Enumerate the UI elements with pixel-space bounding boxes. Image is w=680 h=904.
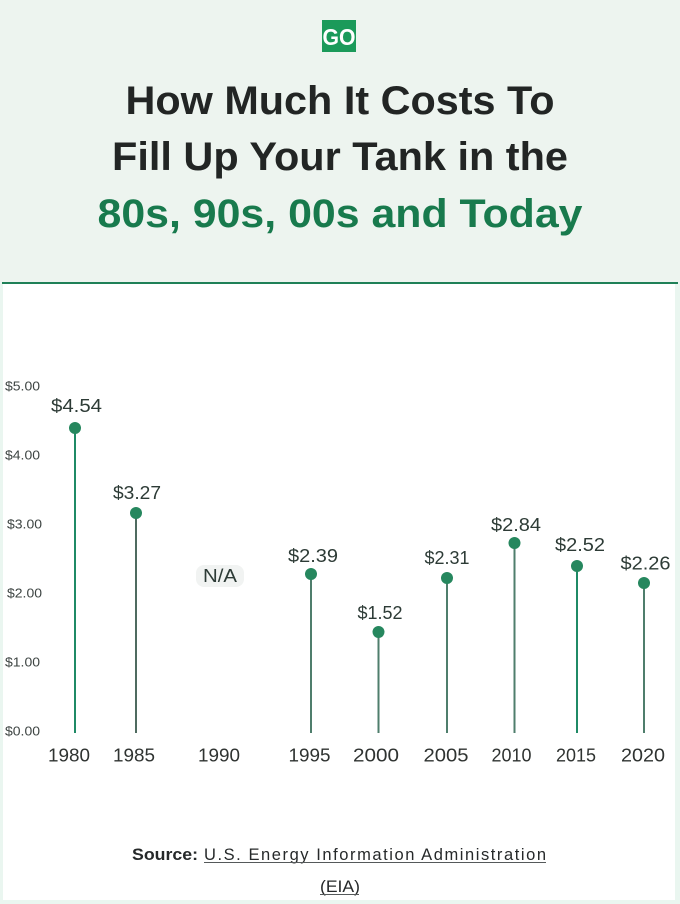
y-axis labels: $5.00 <box>5 380 40 394</box>
x-axis labels: 2010 <box>492 744 532 766</box>
label: 1990 N/A: N/A <box>203 566 237 586</box>
x-axis labels: 2015 <box>556 744 596 766</box>
source note <box>132 846 546 896</box>
label: 1990 N/A <box>196 565 244 587</box>
y-axis labels: $2.00 <box>7 586 42 600</box>
x-axis labels: 2000 <box>353 744 399 766</box>
x-axis labels: 2005 <box>424 744 468 766</box>
x-axis labels: 1980 <box>48 744 90 766</box>
bar: 1995: $2.39 <box>288 545 338 566</box>
title: Fill Up Your Tank in the <box>112 135 568 179</box>
x-axis labels: 1985 <box>113 744 155 766</box>
x-axis labels <box>48 744 665 766</box>
source note: U.S. Energy Information Administration <box>204 846 546 864</box>
bar: 1985: $3.27 <box>113 482 161 503</box>
panel: chart area <box>3 284 675 900</box>
title: How Much It Costs To <box>126 79 554 123</box>
y-axis labels <box>5 380 42 738</box>
y-axis labels: $3.00 <box>7 518 42 532</box>
bar: 1980 <box>51 395 102 733</box>
source note: Source: <box>132 846 198 864</box>
bar: 2010: $2.84 <box>491 514 541 535</box>
bar: 2015: $2.52 <box>555 534 605 555</box>
bar: 1980: $4.54 <box>51 395 102 416</box>
x-axis labels: 1990 <box>198 744 240 766</box>
bar: 2000 <box>358 602 402 733</box>
y-axis labels: $4.00 <box>5 448 40 462</box>
x-axis labels: 1995 <box>288 744 330 766</box>
source note: (EIA) <box>320 878 360 896</box>
bar: 2015 <box>555 534 605 733</box>
lollipop chart <box>51 395 670 733</box>
panel: header <box>0 0 680 282</box>
header divider <box>2 282 678 284</box>
bar: 2020 <box>620 552 670 733</box>
title <box>98 79 583 236</box>
icon: GO logo: GO <box>322 24 356 50</box>
bar: 2010 <box>491 514 541 733</box>
bar: 1995 <box>288 545 338 733</box>
bar: 2000: $1.52 <box>358 602 402 623</box>
title: 80s, 90s, 00s and Today <box>98 192 583 236</box>
x-axis labels: 2020 <box>621 744 665 766</box>
bar: 2020: $2.26 <box>620 552 670 574</box>
y-axis labels: $0.00 <box>5 724 40 738</box>
y-axis labels: $1.00 <box>5 656 40 670</box>
bar: 2005: $2.31 <box>424 547 470 568</box>
bar: 2005 <box>424 547 470 733</box>
bar: 1985 <box>113 482 161 733</box>
